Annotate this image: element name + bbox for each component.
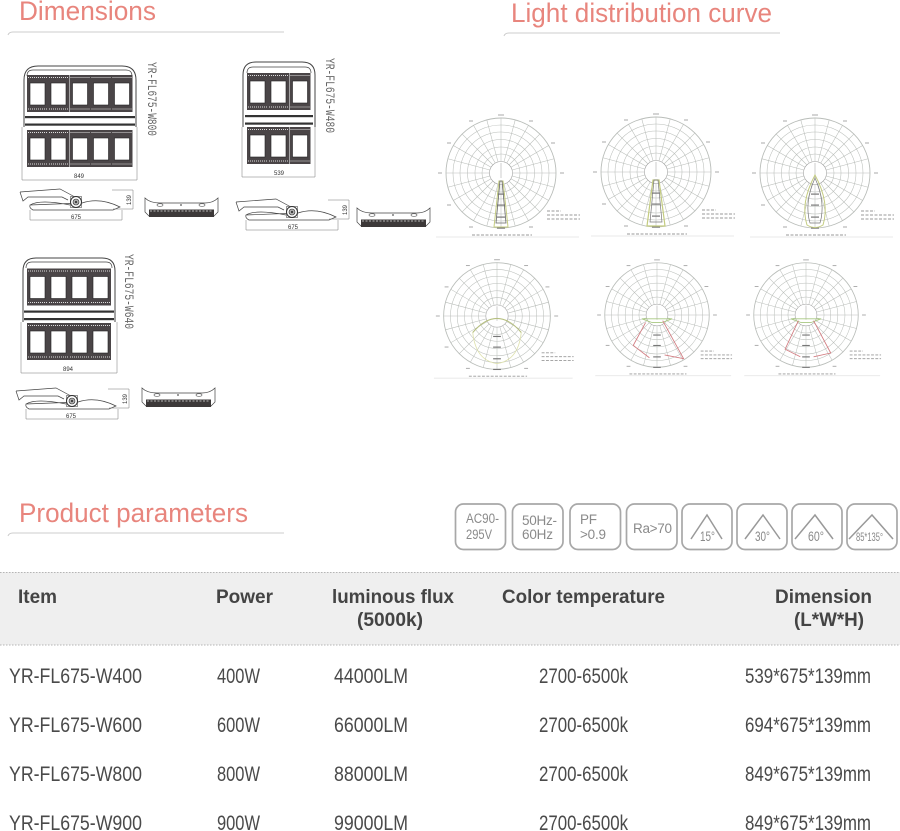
badge: voltage: AC90- [466, 511, 499, 526]
chart: polar curve 4 [434, 260, 574, 378]
table row: W800: 800W [217, 763, 260, 786]
badge: frequency: 60Hz [522, 527, 553, 542]
table row: W900 [9, 812, 871, 831]
chart: polar curve 5 [595, 260, 732, 376]
model label W800: YR-FL675-W800 [144, 62, 159, 136]
badge: 15 degree beam [682, 504, 732, 550]
heading: Product parameters: Product parameters [19, 498, 248, 528]
drawing: YR-FL675-W640 [16, 254, 215, 420]
side view W480: 675 [288, 225, 299, 231]
front view W800 [22, 66, 137, 180]
drawing: YR-FL675-W480 [236, 58, 430, 231]
badge: frequency: 50Hz- [522, 513, 557, 528]
back view W480 [357, 208, 430, 227]
side view W640: 139 [123, 393, 129, 404]
column: Dimension [775, 587, 872, 631]
side view W800 [20, 189, 133, 221]
badge: 30 degree beam: 30° [755, 528, 770, 544]
badge: 15 degree beam: 15° [700, 528, 715, 544]
front view W640 [21, 258, 117, 373]
side view W800: 675 [71, 215, 82, 221]
heading: Dimensions [8, 0, 284, 35]
badge: frequency [512, 504, 563, 550]
side view W800: 139 [127, 194, 133, 205]
model label W640: YR-FL675-W640 [121, 254, 136, 329]
column: luminous flux: luminous flux [332, 587, 454, 608]
table row: W800 [9, 763, 871, 786]
table row: W600: 66000LM [334, 714, 408, 737]
column: Power: Power [216, 587, 274, 608]
badge: voltage: 295V [466, 527, 492, 542]
badge: power factor: >0.9 [580, 527, 606, 542]
table row: W600: 600W [217, 714, 260, 737]
table row: W800: 2700-6500k [539, 763, 628, 786]
column: Item: Item [18, 587, 57, 608]
table row: W800: YR-FL675-W800 [9, 763, 142, 786]
table row: W800: 88000LM [334, 763, 408, 786]
table row: W400: 2700-6500k [539, 665, 628, 688]
badge: colour rendering [626, 504, 677, 550]
badge: power factor [570, 504, 620, 550]
back view W800 [145, 198, 218, 217]
badges row [456, 504, 897, 550]
badge: 85x135 degree beam: 85*135° [856, 530, 883, 544]
badge: voltage [456, 504, 506, 550]
badge: 85x135 degree beam [847, 504, 897, 550]
table row: W600 [9, 714, 871, 737]
column: Color temperature: Color temperature [502, 587, 665, 608]
badge: 30 degree beam [737, 504, 787, 550]
badge: 60 degree beam [792, 504, 842, 550]
chart: polar curve 3 [750, 115, 894, 237]
model label W480: YR-FL675-W480 [322, 58, 337, 133]
drawing: YR-FL675-W800 [20, 62, 218, 221]
front view W800: 849 [74, 174, 85, 180]
column: luminous flux: (5000k) [357, 610, 423, 631]
column: luminous flux [332, 587, 454, 631]
table row: W600: YR-FL675-W600 [9, 714, 142, 737]
table row: W400: YR-FL675-W400 [9, 665, 142, 688]
back view W640 [142, 388, 215, 407]
front view W480 [242, 62, 315, 177]
front view W640: 894 [63, 367, 74, 373]
table row: W600: 694*675*139mm [745, 714, 871, 737]
table row: W800: 849*675*139mm [745, 763, 871, 786]
side view W480: 139 [343, 204, 349, 215]
badge: power factor: PF [580, 512, 597, 527]
table row: W400: 44000LM [334, 665, 408, 688]
column: Dimension: (L*W*H) [794, 610, 864, 631]
table row: W400: 539*675*139mm [745, 665, 871, 688]
chart: polar curve 1 [436, 115, 580, 237]
badge: 60 degree beam: 60° [808, 528, 824, 544]
table row: W400 [9, 665, 871, 688]
chart: polar curve 2 [591, 114, 735, 236]
table row: W400: 400W [217, 665, 260, 688]
table header band [0, 572, 900, 645]
side view W640: 675 [66, 414, 77, 420]
chart: polar curve 6 [744, 260, 881, 376]
heading: Product parameters [8, 498, 284, 536]
front view W480: 539 [274, 171, 285, 177]
badge: colour rendering: Ra>70 [633, 521, 672, 536]
side view W640 [16, 388, 129, 420]
side view W480 [236, 199, 349, 231]
column: Dimension: Dimension [775, 587, 872, 608]
table row: W600: 2700-6500k [539, 714, 628, 737]
